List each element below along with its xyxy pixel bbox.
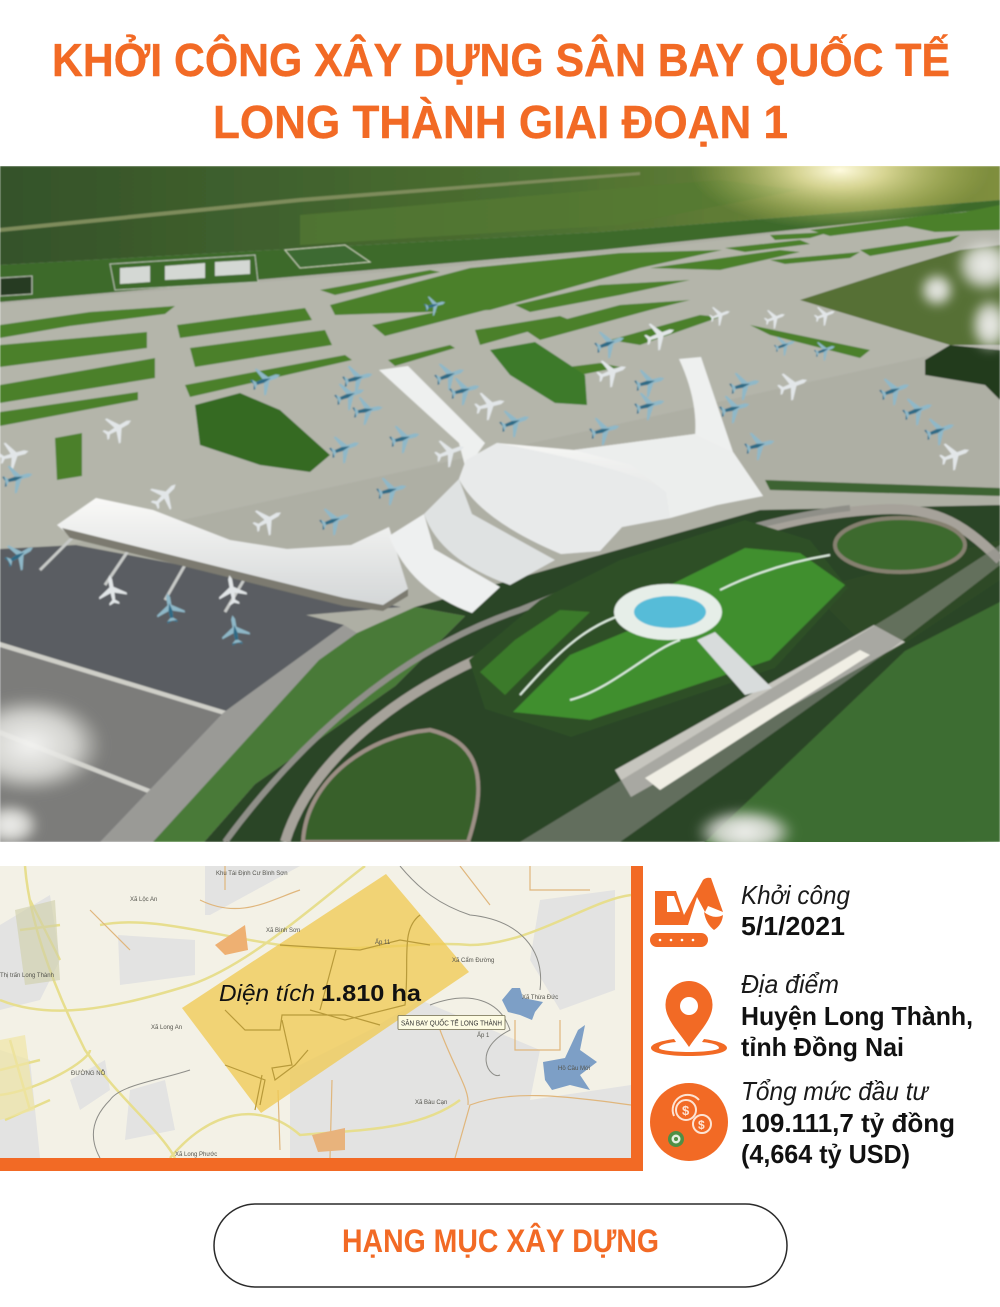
town clusters bbox=[215, 925, 248, 955]
map label: airport: SÂN BAY QUỐC TẾ LONG THÀNH bbox=[401, 1018, 502, 1028]
info: investment: 109.111,7 tỷ đồng bbox=[741, 1108, 955, 1138]
icon: map pin bbox=[651, 981, 727, 1056]
illustration: airport aerial render bbox=[0, 110, 1000, 856]
rooftop garden bbox=[469, 520, 848, 737]
icon: coins bbox=[650, 1083, 728, 1161]
lakes bbox=[502, 988, 543, 1020]
info: location: Địa điểm bbox=[741, 969, 839, 999]
map place names: ĐƯỜNG NỖ bbox=[71, 1070, 106, 1077]
map place names: Thị trấn Long Thành bbox=[0, 973, 54, 979]
highlighted airport area bbox=[182, 874, 469, 1113]
info: start date: 5/1/2021 bbox=[741, 911, 845, 941]
info: investment: Tổng mức đầu tư bbox=[741, 1076, 929, 1106]
title: KHỞI CÔNG XÂY DỰNG SÂN BAY QUỐC TẾ bbox=[52, 34, 950, 86]
map label: airport bbox=[398, 1016, 505, 1030]
curved road bbox=[285, 509, 1000, 842]
map roads bbox=[0, 866, 631, 1158]
clouds bbox=[0, 237, 1000, 856]
info: start date bbox=[650, 878, 850, 947]
map place names: Ấp 1 bbox=[477, 1032, 490, 1039]
map area label: Diện tích bbox=[219, 980, 315, 1006]
taxiway grass patches bbox=[0, 205, 1000, 426]
lower-left apron bbox=[0, 545, 401, 713]
map place names: Xã Bình Sơn bbox=[266, 928, 300, 934]
info: start date: Khởi công bbox=[741, 880, 850, 910]
map area label bbox=[220, 984, 422, 1004]
info: location: tỉnh Đồng Nai bbox=[741, 1032, 904, 1062]
terminal building bbox=[57, 357, 763, 613]
map place names: Hồ Cầu Mới bbox=[558, 1066, 590, 1072]
section button: construction items: HẠNG MỤC XÂY DỰNG bbox=[342, 1223, 659, 1259]
title: LONG THÀNH GIAI ĐOẠN 1 bbox=[213, 96, 788, 148]
oval lawn south bbox=[303, 730, 478, 842]
title bbox=[52, 34, 950, 148]
green strip bbox=[153, 607, 465, 842]
map place names bbox=[0, 871, 590, 1158]
rail station band bbox=[615, 625, 905, 797]
map place names: Xã Long An bbox=[151, 1025, 182, 1031]
map place names: Ấp 11 bbox=[375, 939, 391, 946]
icon: coins: $ bbox=[682, 1103, 690, 1118]
oval lawn east bbox=[835, 518, 965, 572]
map orange frame bbox=[0, 866, 643, 1171]
info: investment: (4,664 tỷ USD) bbox=[741, 1139, 910, 1169]
info: location: Huyện Long Thành, bbox=[741, 1001, 973, 1031]
location map bbox=[0, 866, 631, 1158]
map place names: Xã Thừa Đức bbox=[522, 995, 558, 1001]
info: investment bbox=[650, 1076, 955, 1169]
ground right of terminal bbox=[204, 505, 1000, 842]
apron piers bbox=[40, 535, 245, 612]
map place names: Xã Lộc An bbox=[130, 897, 157, 903]
map place names: Khu Tái Định Cư Bình Sơn bbox=[216, 871, 288, 877]
map place names: Xã Cẩm Đường bbox=[452, 957, 494, 964]
info: location bbox=[651, 969, 973, 1062]
section button: construction items bbox=[214, 1204, 787, 1287]
aircraft bbox=[0, 293, 974, 647]
map place names: Xã Bàu Cạn bbox=[415, 1100, 447, 1106]
icon: excavator bbox=[650, 878, 723, 947]
icon: coins: $ bbox=[698, 1118, 705, 1132]
map area label: 1.810 ha bbox=[321, 980, 421, 1006]
map place names: Xã Long Phước bbox=[175, 1152, 217, 1158]
